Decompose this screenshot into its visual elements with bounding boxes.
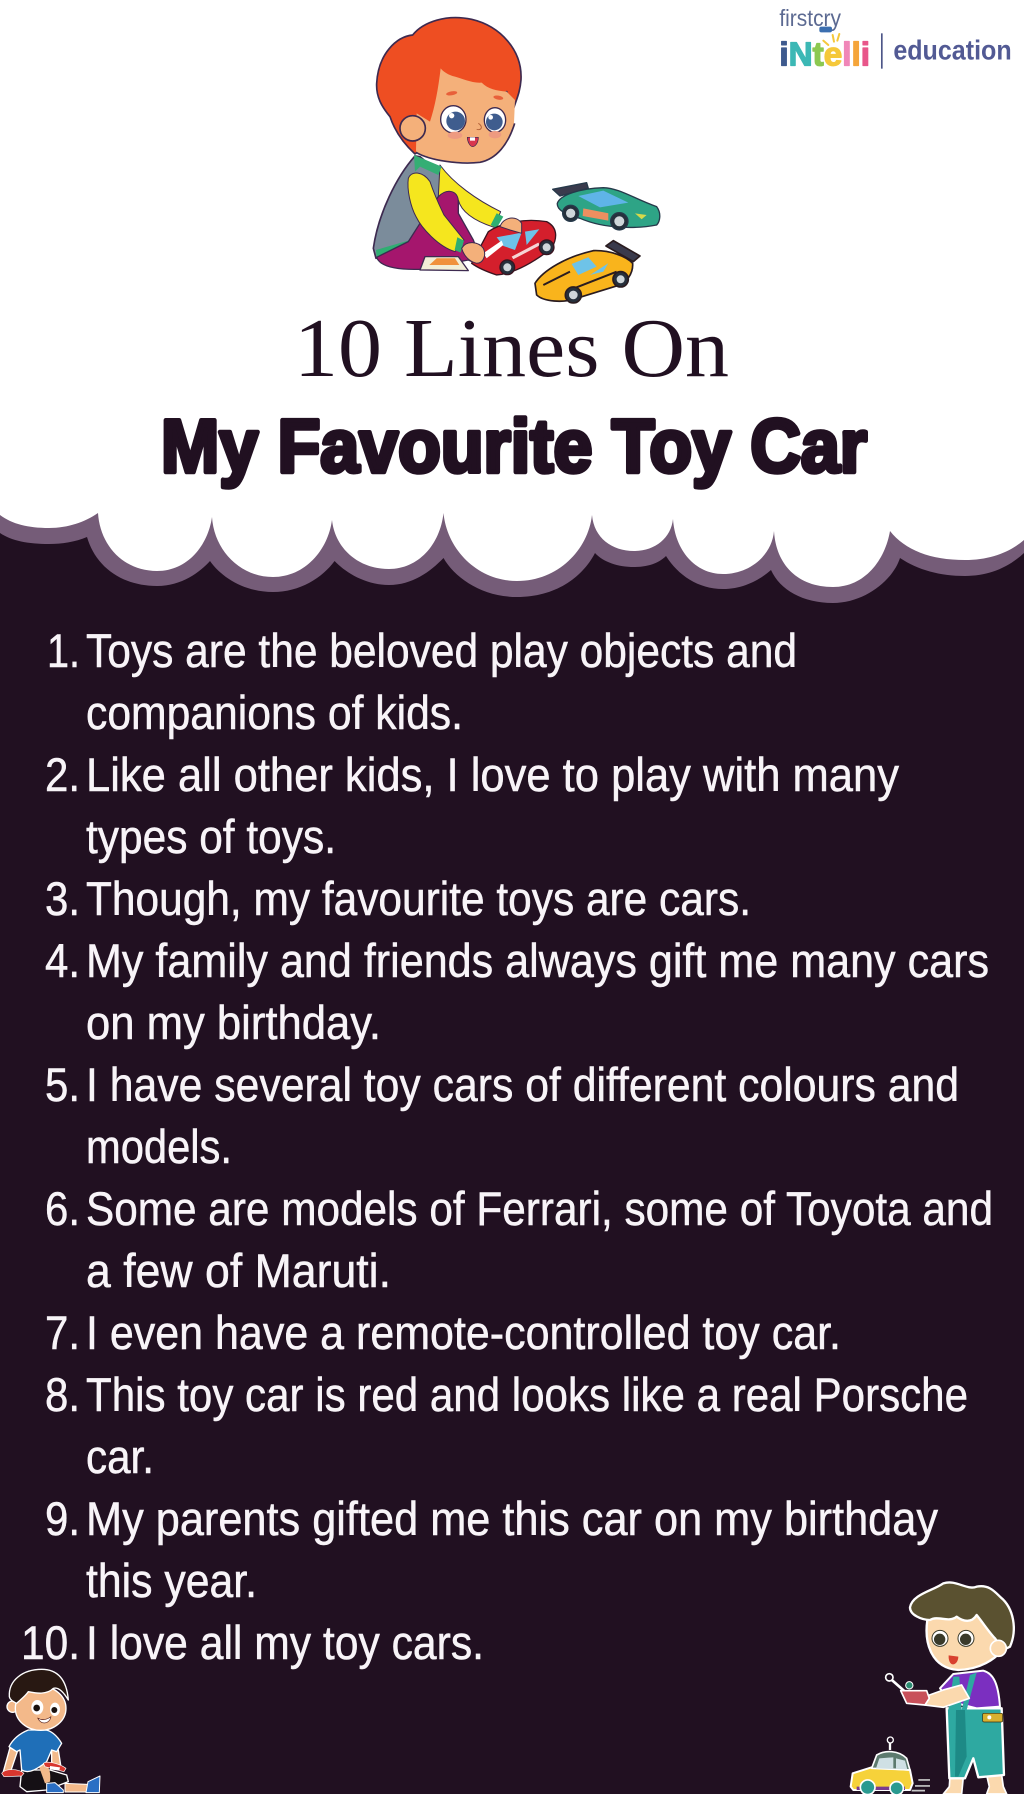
item 2: Like all other kids, I love to play with many — [86, 748, 899, 801]
toy car: yellow — [535, 241, 640, 303]
illustration: boy playing with toy cars — [373, 18, 660, 303]
shoes — [86, 1776, 100, 1793]
white cloud header edge — [0, 490, 1024, 587]
item 6 — [45, 1182, 993, 1297]
overalls — [947, 1708, 1004, 1778]
boy head — [377, 18, 521, 163]
hair — [9, 1669, 68, 1703]
item 5: 5. — [45, 1058, 80, 1111]
item 10: 10. — [21, 1616, 80, 1669]
toy car — [851, 1737, 930, 1795]
item 8: car. — [86, 1430, 154, 1483]
item 4: 4. — [45, 934, 80, 987]
boy body and clothes — [373, 155, 503, 271]
item 1 — [47, 624, 797, 739]
face — [416, 68, 515, 162]
illustration: boy with remote-controlled car bottom right — [851, 1582, 1014, 1795]
item 3: 3. — [45, 872, 80, 925]
item 7: 7. — [45, 1306, 80, 1359]
logo: firstcry intelli education — [779, 5, 1012, 74]
numbered list — [21, 624, 993, 1669]
dark panel background — [0, 520, 1024, 1794]
item 9: this year. — [86, 1554, 257, 1607]
item 2: types of toys. — [86, 810, 336, 863]
arms — [3, 1748, 17, 1773]
mouth — [467, 137, 478, 147]
item 4 — [45, 934, 989, 1049]
hair — [377, 18, 521, 154]
toy car left — [2, 1770, 24, 1777]
blue shirt — [9, 1730, 62, 1772]
item 7: I even have a remote-controlled toy car. — [86, 1306, 841, 1359]
purple shirt — [940, 1671, 1000, 1708]
head — [927, 1607, 1006, 1670]
legs — [20, 1770, 68, 1792]
cloud border band — [0, 490, 1024, 603]
item 8 — [45, 1368, 968, 1483]
buckle — [983, 1713, 1003, 1722]
ear — [400, 116, 425, 141]
illustration: sitting boy bottom left — [2, 1669, 100, 1793]
eyes — [932, 1630, 948, 1646]
item 8: 8. — [45, 1368, 80, 1421]
item 6: 6. — [45, 1182, 80, 1235]
shins and feet — [943, 1775, 1007, 1794]
title — [161, 302, 867, 488]
item 6: a few of Maruti. — [86, 1244, 391, 1297]
toy car right — [43, 1762, 66, 1772]
ear — [990, 1640, 1006, 1656]
hands on the red car — [462, 218, 522, 263]
item 1: Toys are the beloved play objects and — [86, 624, 797, 677]
remote control — [890, 1678, 905, 1692]
item 1: companions of kids. — [86, 686, 463, 739]
toy car: red — [472, 220, 556, 275]
item 3: Though, my favourite toys are cars. — [86, 872, 751, 925]
com tag — [819, 27, 832, 32]
title line 2: My Favourite Toy Car — [161, 404, 867, 488]
mouth — [949, 1655, 958, 1664]
item 2 — [45, 748, 899, 863]
eyes — [31, 1700, 43, 1715]
item 9: 9. — [45, 1492, 80, 1545]
item 5: models. — [86, 1120, 232, 1173]
title line 1: 10 Lines On — [294, 302, 729, 395]
item 10: I love all my toy cars. — [86, 1616, 484, 1669]
item 9: My parents gifted me this car on my birthday — [86, 1492, 938, 1545]
firstcry wordmark: firstcry — [779, 5, 842, 31]
arm — [925, 1685, 969, 1707]
toy car: green — [553, 183, 660, 230]
sun rays — [823, 34, 839, 45]
hair — [910, 1582, 1014, 1650]
item 1: 1. — [47, 624, 80, 677]
item 5: I have several toy cars of different colours and — [86, 1058, 959, 1111]
intelli wordmark: iNtelli — [779, 37, 870, 74]
item 9 — [45, 1492, 938, 1607]
item 4: on my birthday. — [86, 996, 381, 1049]
education wordmark: education — [893, 34, 1012, 65]
logo divider — [881, 33, 883, 69]
item 5 — [45, 1058, 959, 1173]
bottom white strip — [0, 1794, 1024, 1800]
mouth — [38, 1717, 51, 1723]
item 2: 2. — [45, 748, 80, 801]
eyes — [441, 106, 466, 133]
head — [7, 1701, 18, 1712]
